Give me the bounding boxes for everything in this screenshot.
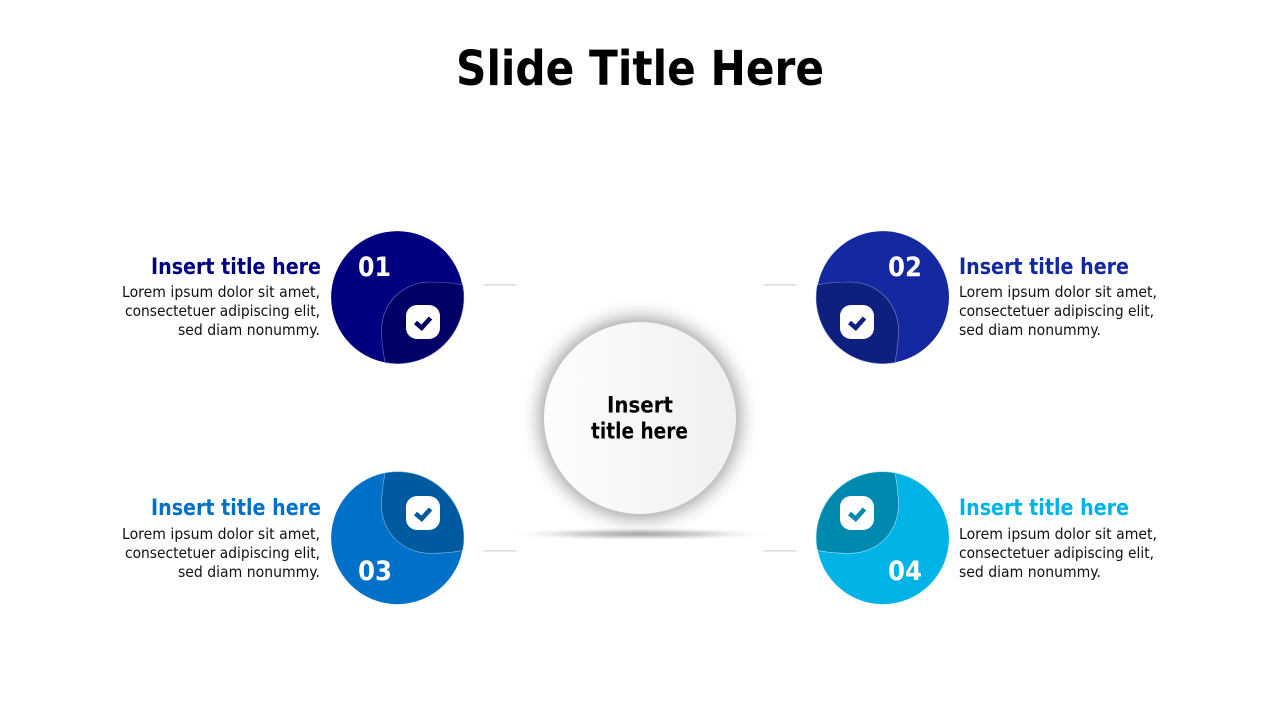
body 03: [122, 525, 320, 581]
body 02: sed diam nonummy.: [959, 321, 1101, 339]
connector: bottom right: [764, 550, 796, 552]
connector: top right: [764, 284, 796, 286]
body 04: consectetuer adipiscing elit,: [959, 544, 1154, 562]
icon disc 04: [816, 472, 949, 604]
body 02: [959, 283, 1157, 339]
title: Slide Title Here: [456, 41, 824, 97]
number 03: 03: [358, 556, 392, 587]
central label: [591, 394, 688, 444]
icon disc 03: [331, 472, 464, 604]
floor shadow: [500, 527, 780, 541]
central label: title here: [591, 420, 688, 444]
central circle: [540, 318, 740, 518]
body 01: consectetuer adipiscing elit,: [125, 302, 320, 320]
heading 02: Insert title here: [959, 255, 1129, 280]
number 04: 04: [888, 556, 922, 587]
body 04: Lorem ipsum dolor sit amet,: [959, 525, 1157, 543]
body 01: Lorem ipsum dolor sit amet,: [122, 283, 320, 301]
body 04: [959, 525, 1157, 581]
heading 04: Insert title here: [959, 496, 1129, 521]
connector: bottom left: [484, 550, 516, 552]
body 03: sed diam nonummy.: [178, 563, 320, 581]
heading 03: Insert title here: [151, 496, 321, 521]
number 01: 01: [358, 252, 391, 283]
body 02: consectetuer adipiscing elit,: [959, 302, 1154, 320]
item 04: [816, 472, 1157, 604]
central label: Insert: [607, 394, 673, 418]
heading 01: Insert title here: [151, 255, 321, 280]
body 04: sed diam nonummy.: [959, 563, 1101, 581]
body 01: [122, 283, 320, 339]
body 03: consectetuer adipiscing elit,: [125, 544, 320, 562]
item 03: [122, 472, 464, 604]
body 02: Lorem ipsum dolor sit amet,: [959, 283, 1157, 301]
item 01: [122, 231, 464, 364]
item 02: [816, 231, 1157, 364]
icon disc 01: [331, 231, 464, 364]
connector: top left: [484, 284, 516, 286]
icon disc 02: [816, 231, 949, 364]
body 03: Lorem ipsum dolor sit amet,: [122, 525, 320, 543]
body 01: sed diam nonummy.: [178, 321, 320, 339]
number 02: 02: [888, 252, 922, 283]
